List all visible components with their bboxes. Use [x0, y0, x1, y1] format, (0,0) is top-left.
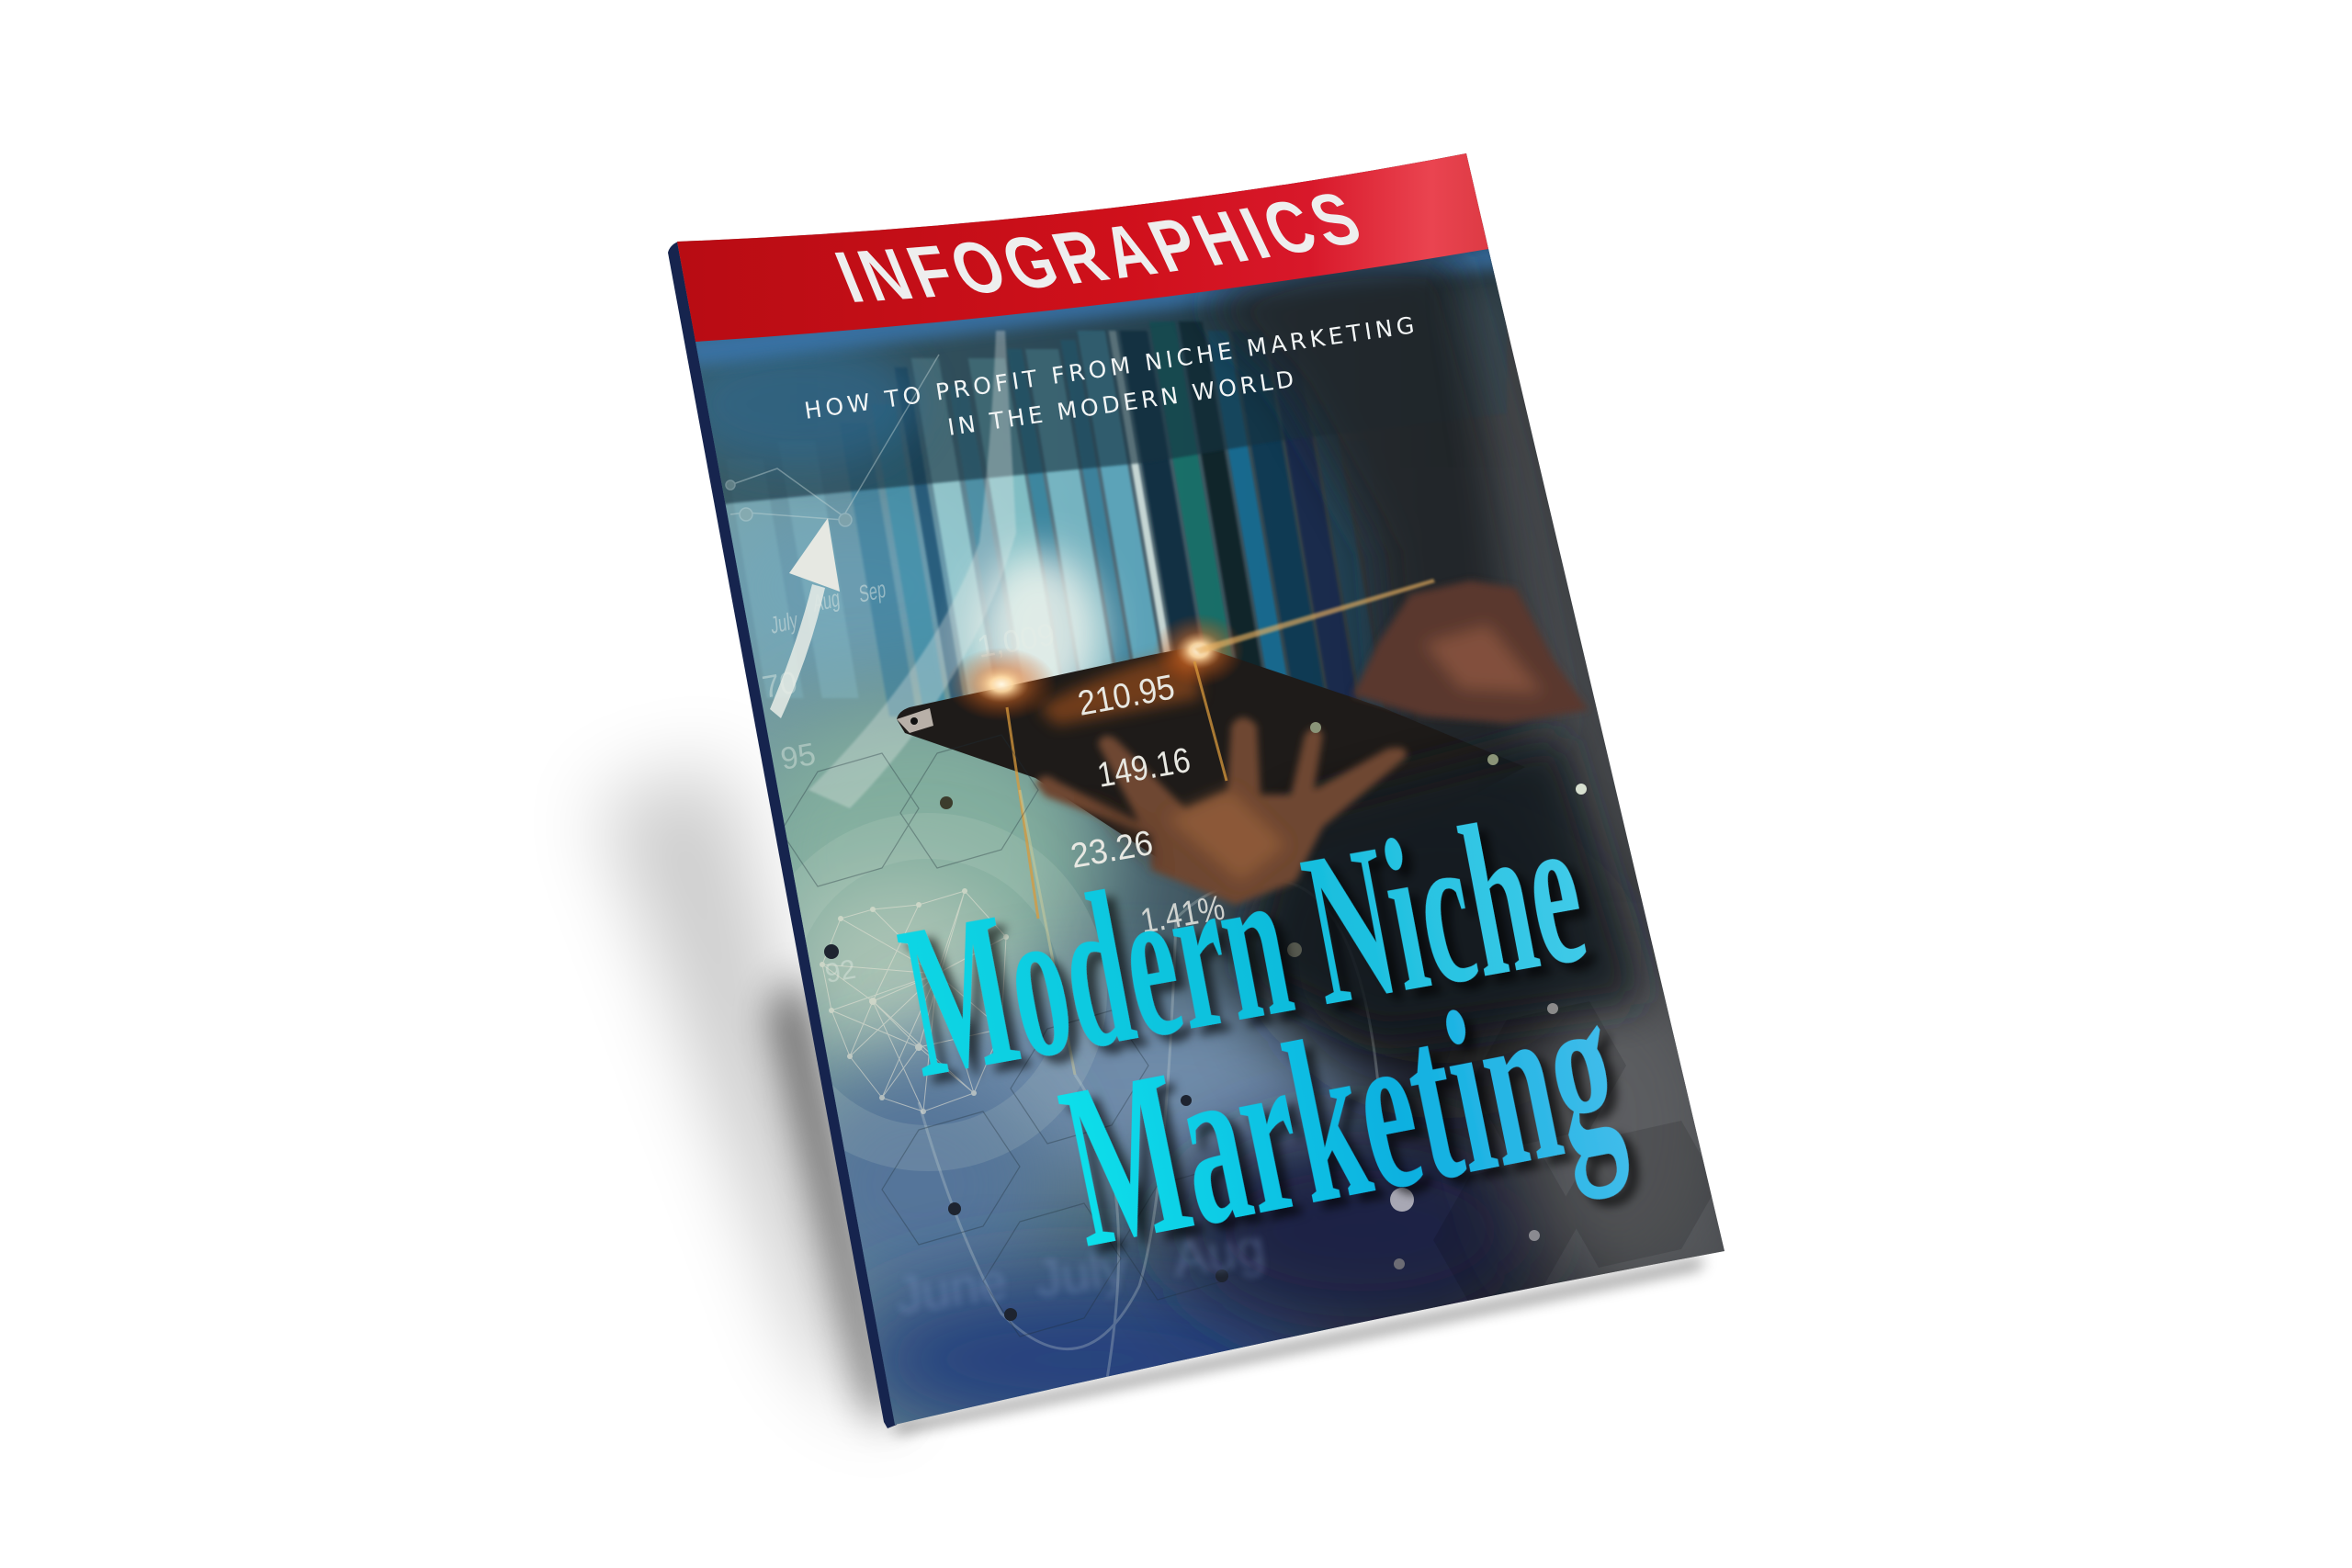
- big rising arrow: [770, 331, 1016, 808]
- chart bars: [735, 321, 1384, 716]
- red banner: [677, 153, 1488, 342]
- bottom right grey: [1516, 974, 1718, 1286]
- blue strip below banner: [684, 241, 1507, 367]
- lower hand: [1035, 717, 1407, 905]
- blurred month text: [892, 1218, 1268, 1325]
- tablet figures: 149.16: [1094, 741, 1193, 795]
- tablet figures: 210.95: [1075, 668, 1178, 724]
- main title: Modern Niche: [885, 764, 1600, 1123]
- month axis labels: Sep: [858, 575, 887, 608]
- blurred month text: Aug: [1170, 1218, 1268, 1288]
- month axis labels: July: [770, 606, 798, 639]
- faint chart numbers: 92: [822, 954, 858, 989]
- chart line and nodes: [726, 355, 939, 526]
- cover artwork: [677, 153, 1724, 1425]
- tablet figures: [1068, 668, 1227, 942]
- hexagon grid: [781, 735, 1259, 1337]
- faint chart numbers: 1,009: [975, 617, 1057, 665]
- network nodes: [824, 722, 1587, 1321]
- circular rings: [772, 836, 1084, 1148]
- month axis labels: [770, 575, 887, 639]
- top left blue tint: [680, 340, 919, 468]
- faint chart numbers: 95: [778, 737, 819, 777]
- top dark overlay band: [680, 220, 1507, 510]
- cast shadow behind book: [597, 762, 1704, 1433]
- tablet: [897, 646, 1525, 882]
- faint chart numbers: 70: [760, 665, 800, 705]
- tablet figures: 23.26: [1068, 824, 1156, 876]
- month axis labels: Aug: [812, 584, 841, 617]
- book cover mockup: [580, 153, 1724, 1446]
- dark hexagons right: [1433, 1001, 1718, 1304]
- main title: [885, 764, 1636, 1297]
- upper hand: [1352, 581, 1589, 723]
- book spine: [668, 242, 897, 1428]
- lens flares: [946, 579, 1435, 1075]
- subtitle: HOW TO PROFIT FROM NICHE MARKETING: [803, 311, 1416, 424]
- centre glow: [974, 551, 1102, 716]
- faint chart numbers: [760, 617, 1057, 989]
- subtitle: IN THE MODERN WORLD: [946, 366, 1295, 441]
- main title: Marketing: [1045, 938, 1636, 1297]
- arrowhead: [789, 518, 840, 592]
- blurred month text: June: [892, 1252, 1011, 1325]
- network mesh: [820, 888, 1009, 1114]
- background colour field: [643, 138, 1746, 1442]
- tablet figures: 1.41%: [1137, 889, 1227, 942]
- wave line: [919, 880, 1378, 1488]
- banner title: INFOGRAPHICS: [834, 194, 1359, 302]
- right glossy sheen: [1461, 276, 1746, 1286]
- blurred month text: July: [1032, 1238, 1130, 1308]
- suited figure silhouette: [1189, 252, 1510, 733]
- dark suit sleeve: [1240, 735, 1645, 1038]
